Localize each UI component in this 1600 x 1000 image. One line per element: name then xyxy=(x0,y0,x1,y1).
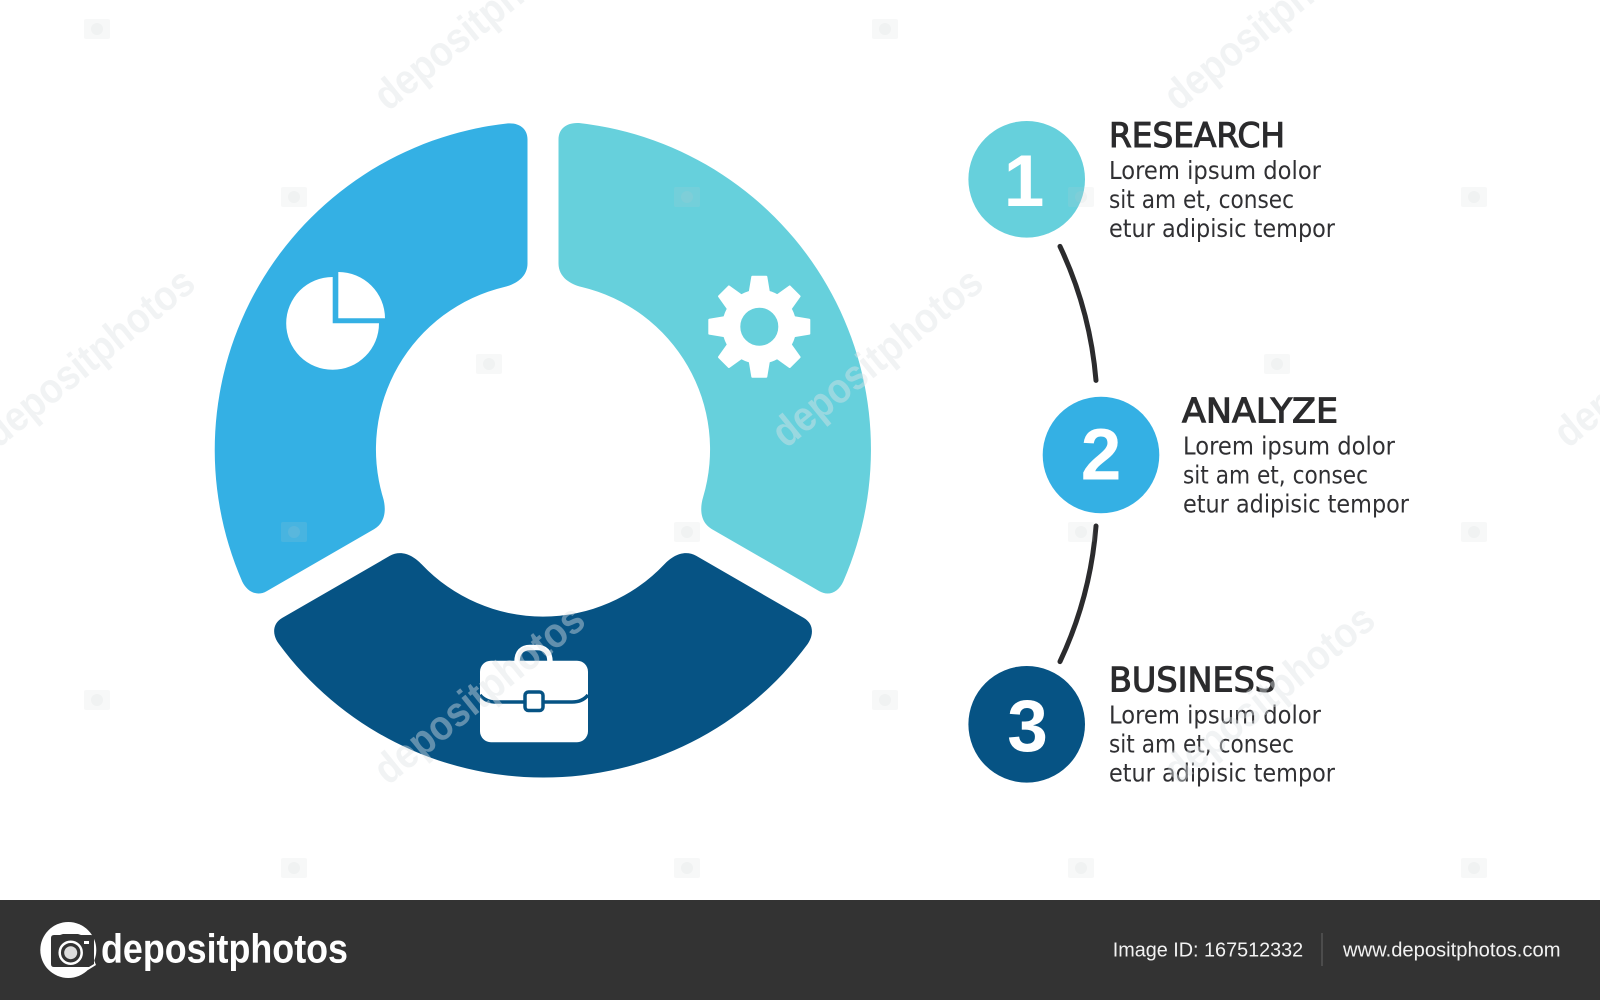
text block: analyze: sit am et, consec xyxy=(1183,460,1368,490)
step 1 badge: 1 xyxy=(1004,141,1044,222)
text block: analyze: etur adipisic tempor xyxy=(1183,490,1410,518)
icon: gear xyxy=(709,277,809,377)
connector arc 1 to 2 xyxy=(1060,246,1096,380)
watermark pattern: depositphotos xyxy=(1154,595,1383,793)
watermark pattern: depositphotos xyxy=(762,258,991,456)
footer bar xyxy=(0,900,1600,1000)
step 2 badge: 2 xyxy=(1081,414,1121,496)
text block: business xyxy=(1109,660,1336,788)
segment: research xyxy=(558,123,871,593)
icon: briefcase xyxy=(480,648,588,742)
text block: analyze xyxy=(1182,391,1410,518)
donut chart xyxy=(96,93,871,897)
step 2 badge xyxy=(1043,397,1159,513)
text block: analyze: ANALYZE xyxy=(1182,391,1338,431)
text block: business: Lorem ipsum dolor xyxy=(1109,700,1322,730)
text block: business: BUSINESS xyxy=(1109,660,1276,700)
text block: research xyxy=(1109,116,1336,243)
text block: research: etur adipisic tempor xyxy=(1109,214,1336,243)
icon: pie chart xyxy=(286,272,385,370)
text block: research: Lorem ipsum dolor xyxy=(1109,156,1322,185)
watermark pattern: depositphotos xyxy=(364,595,593,793)
text block: business: sit am et, consec xyxy=(1109,730,1294,758)
step 3 badge: 3 xyxy=(1007,686,1048,767)
text block: research: RESEARCH xyxy=(1109,116,1285,156)
step 3 badge xyxy=(968,666,1085,783)
image id: Image ID: 167512332 xyxy=(1113,940,1303,962)
segment: business xyxy=(254,391,818,897)
segment: analyze xyxy=(96,93,660,599)
text block: analyze: Lorem ipsum dolor xyxy=(1183,432,1396,460)
text block: research: sit am et, consec xyxy=(1109,185,1294,214)
website url: www.depositphotos.com xyxy=(1342,940,1560,962)
connector arc 2 to 3 xyxy=(1060,526,1096,662)
text block: business: etur adipisic tempor xyxy=(1109,758,1336,788)
logo mark xyxy=(40,922,96,978)
step 1 badge xyxy=(968,121,1085,238)
logo wordmark: depositphotos xyxy=(101,926,348,972)
